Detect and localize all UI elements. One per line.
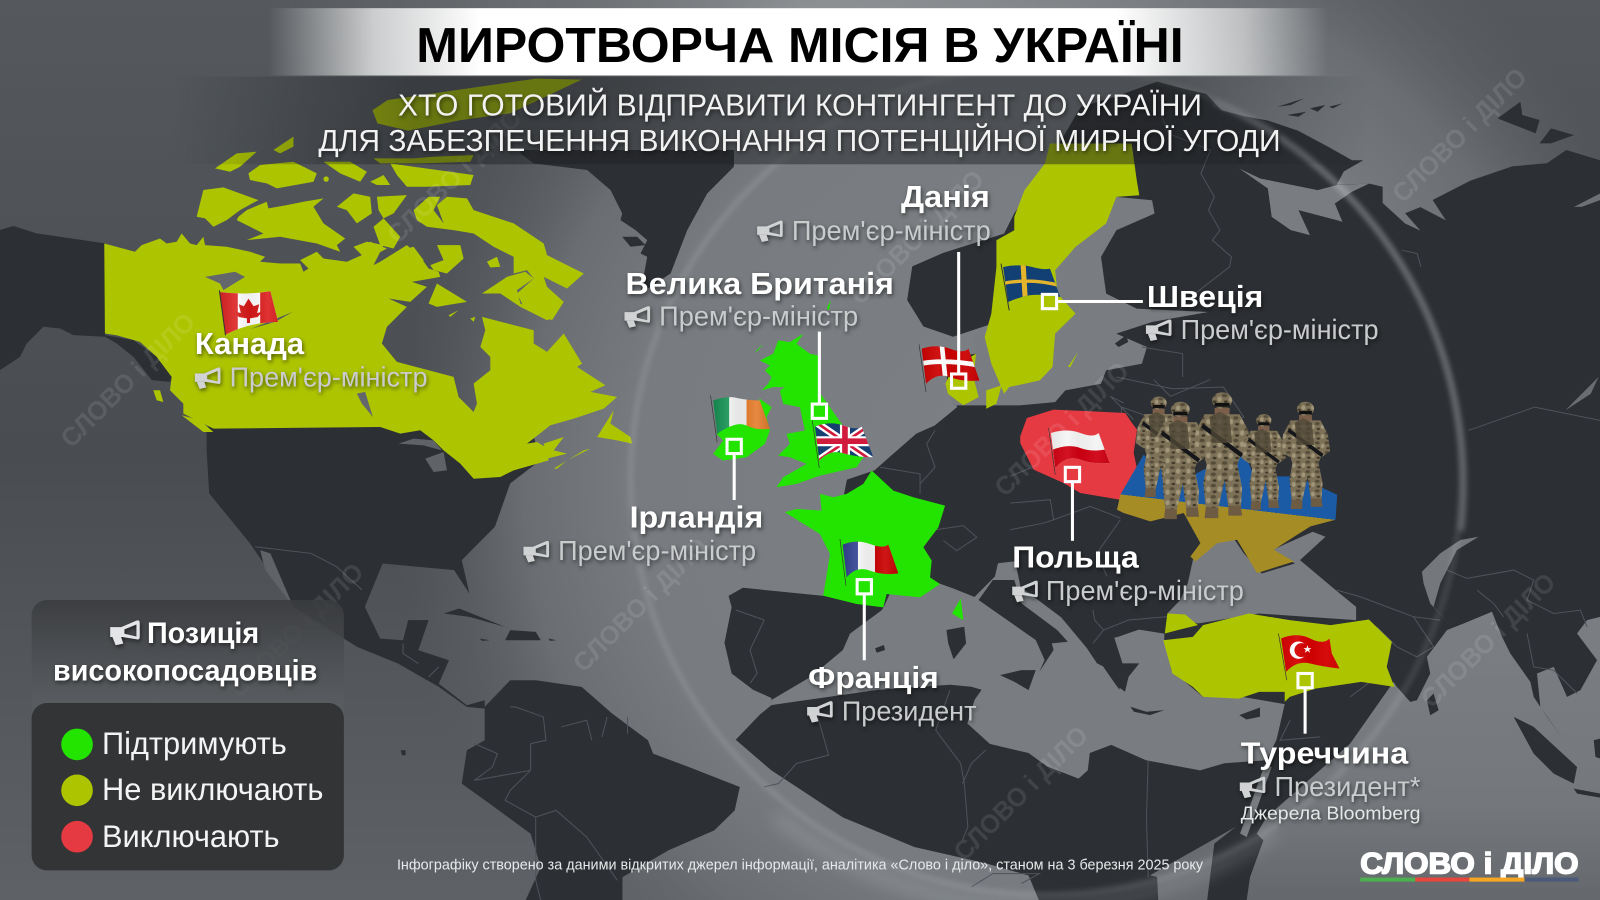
label: Poland xyxy=(1012,540,1244,606)
highlighted country: Gotland xyxy=(1068,352,1078,367)
label: United Kingdom: Велика Британія xyxy=(626,267,894,301)
highlighted country: Corsica xyxy=(952,598,963,620)
label: Ireland: Прем'єр-міністр xyxy=(558,535,756,566)
watermarks: СЛОВО і ДІЛО xyxy=(568,533,713,678)
label: Denmark: Данія xyxy=(901,180,990,214)
highlighted country: Canada xyxy=(104,137,632,479)
flag: Sweden xyxy=(999,262,1063,310)
label: Sweden: Швеція xyxy=(1147,280,1263,314)
title band xyxy=(267,8,1329,76)
Shetland xyxy=(827,300,831,310)
label: France xyxy=(807,661,977,726)
watermarks: СЛОВО і ДІЛО xyxy=(990,357,1135,502)
lakes on Canada xyxy=(205,272,245,290)
legend header panel xyxy=(32,600,344,870)
sea: Black Sea xyxy=(1167,532,1356,624)
label: Sweden: Прем'єр-міністр xyxy=(1181,314,1379,345)
legend heading xyxy=(53,617,317,688)
soldiers group over Ukraine xyxy=(1136,392,1330,519)
sea: Red Sea xyxy=(1240,764,1272,837)
map: dark islands on seas xyxy=(875,335,1600,798)
label: Canada: Канада xyxy=(195,327,305,361)
highlighted country: Turkey xyxy=(1163,614,1394,702)
subtitle: ДЛЯ ЗАБЕЗПЕЧЕННЯ ВИКОНАННЯ ПОТЕНЦІЙНОЇ МИРНОЇ УГОДИ xyxy=(318,124,1281,158)
Ellesmere Island xyxy=(372,79,582,131)
Saaremaa xyxy=(1115,335,1128,347)
land: South America xyxy=(462,680,740,900)
land: North and Central America xyxy=(207,427,541,709)
label: France: Франція xyxy=(808,661,939,695)
label: Turkey: Туреччина xyxy=(1241,736,1409,770)
land: Caribbean islands xyxy=(401,608,556,755)
Baja gulf xyxy=(260,550,293,607)
label: Canada: Прем'єр-міністр xyxy=(230,362,428,393)
highlighted country: Poland xyxy=(1020,410,1139,500)
land: Alaska xyxy=(0,226,172,382)
highlighted country: France xyxy=(785,471,945,607)
label: Denmark: Прем'єр-міністр xyxy=(792,215,991,246)
label: Sweden xyxy=(1146,280,1379,345)
label: Turkey: Президент* xyxy=(1274,771,1421,802)
subtitle xyxy=(318,88,1281,158)
marker and leader: Ireland xyxy=(727,439,741,500)
watermarks: СЛОВО і ДІЛО xyxy=(224,558,369,703)
sea: Baltic xyxy=(948,197,1208,405)
watermarks: СЛОВО і ДІЛО xyxy=(1416,568,1561,713)
title: МИРОТВОРЧА МІСІЯ В УКРАЇНІ xyxy=(416,19,1184,73)
marker and leader: United Kingdom xyxy=(812,332,827,418)
subtitle: ХТО ГОТОВИЙ ВІДПРАВИТИ КОНТИНГЕНТ ДО УКРАЇНИ xyxy=(398,88,1202,122)
label: Turkey: Джерела Bloomberg xyxy=(1241,802,1420,823)
decorative lens ring xyxy=(631,64,1464,900)
label: Denmark xyxy=(757,180,991,246)
subtitle band xyxy=(173,77,1367,164)
flag: Ireland xyxy=(710,394,772,442)
country borders xyxy=(255,113,1600,900)
label: Ireland xyxy=(523,501,763,566)
marker and leader: Denmark xyxy=(952,252,966,388)
legend item: exclude: Виключають xyxy=(102,818,280,854)
flag: Canada xyxy=(218,290,278,336)
watermarks: СЛОВО і ДІЛО xyxy=(382,104,528,249)
lake Baikal xyxy=(1565,377,1598,410)
label: Canada xyxy=(195,327,428,393)
land: Arctic islands xyxy=(1277,98,1574,143)
lens reflection shape xyxy=(1422,537,1479,628)
legend item: support: Підтримують xyxy=(102,725,287,761)
sea: White Sea xyxy=(1239,168,1369,235)
watermarks: СЛОВО і ДІЛО xyxy=(845,165,990,310)
label: United Kingdom xyxy=(624,267,894,332)
panel: legend xyxy=(32,600,344,870)
watermarks: СЛОВО і ДІЛО xyxy=(949,721,1094,866)
sea: Mediterranean xyxy=(771,561,1285,779)
Italy and islands xyxy=(875,580,1260,719)
marker and leader: France xyxy=(857,580,871,660)
label: France: Президент xyxy=(842,695,977,726)
highlighted country: Ukraine in flag colours xyxy=(1117,450,1337,573)
sea: gap south of Arabia xyxy=(1150,827,1236,900)
land: Eurasia and Africa xyxy=(724,82,1600,900)
label: United Kingdom: Прем'єр-міністр xyxy=(659,301,858,332)
legend item: do not exclude: Не виключають xyxy=(102,771,323,807)
label: Turkey xyxy=(1240,736,1421,823)
land: dark region east of Greenland xyxy=(520,150,734,293)
sea: Siberian inlet xyxy=(1574,193,1600,207)
flag: Poland xyxy=(1049,426,1112,475)
flag: United Kingdom xyxy=(812,421,877,468)
legend heading: високопосадовців xyxy=(53,655,317,688)
label: Ireland: Ірландія xyxy=(630,501,763,535)
label: Poland: Прем'єр-міністр xyxy=(1046,575,1244,606)
flag: Turkey xyxy=(1278,632,1342,680)
footer source note: Інфографіку створено за даними відкритих джерел інформації, аналітика «Слово і діло», станом на 3 березня 2025 року xyxy=(397,857,1204,873)
Southeast Asia islands xyxy=(1427,694,1600,798)
marker and leader: Sweden xyxy=(1042,294,1143,309)
highlighted country: Ireland xyxy=(713,399,772,461)
flag: France xyxy=(840,537,900,586)
logo: Слово і діло: СЛОВО і ДІЛО xyxy=(1360,847,1579,880)
map: seas and lakes xyxy=(260,168,1600,900)
legend heading: Позиція xyxy=(147,617,259,650)
marker and leader: Turkey xyxy=(1298,673,1312,734)
highlighted country: Sweden xyxy=(985,143,1139,394)
highlighted country: United Kingdom xyxy=(755,334,863,487)
highlighted country: Denmark xyxy=(945,354,1002,409)
legend body xyxy=(32,703,344,870)
watermarks: СЛОВО і ДІЛО xyxy=(1388,63,1533,208)
watermarks: СЛОВО і ДІЛО xyxy=(56,308,201,453)
marker and leader: Poland xyxy=(1065,467,1080,541)
label: Poland: Польща xyxy=(1012,540,1140,574)
top light strip xyxy=(265,0,1337,8)
sea: Indian Ocean xyxy=(1242,612,1600,900)
flag: Denmark xyxy=(919,344,980,392)
